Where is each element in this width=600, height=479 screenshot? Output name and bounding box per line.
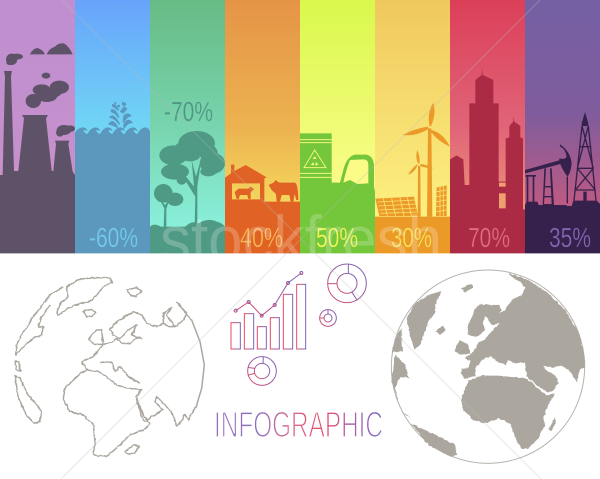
label: 70%: 70% (468, 222, 510, 253)
column backgrounds (0, 0, 600, 253)
icon: cow in barn (235, 187, 254, 199)
panel: factory pollution silhouette (0, 43, 75, 253)
outline globe (15, 278, 204, 457)
solid globe (391, 270, 585, 463)
bar chart (231, 284, 306, 349)
panel: nuclear waste silhouette (300, 133, 375, 253)
panel: oil rig silhouette (525, 112, 600, 253)
donut chart small (320, 310, 336, 326)
label: -60%: -60% (89, 222, 138, 253)
watermark: stockfresh: stockfresh (160, 202, 442, 276)
label: 30%: 30% (391, 222, 432, 253)
label: 40%: 40% (240, 222, 283, 253)
panel: renewable energy silhouette (375, 103, 450, 253)
panel: farm silhouette (225, 165, 300, 253)
icon: cow (269, 180, 298, 202)
watermark diagonals (61, 0, 541, 479)
panel: city skyline silhouette (450, 68, 525, 253)
panel: water and fountain silhouette (75, 103, 150, 253)
title: INFOGRAPHIC: INFOGRAPHIC (214, 404, 383, 445)
donut chart large (328, 264, 366, 303)
line chart (234, 271, 303, 317)
donut chart medium (248, 357, 276, 385)
label: 50%: 50% (316, 222, 358, 253)
chart icons (231, 264, 366, 385)
label: -70%: -70% (164, 96, 213, 127)
panel: forest silhouette (150, 131, 225, 253)
